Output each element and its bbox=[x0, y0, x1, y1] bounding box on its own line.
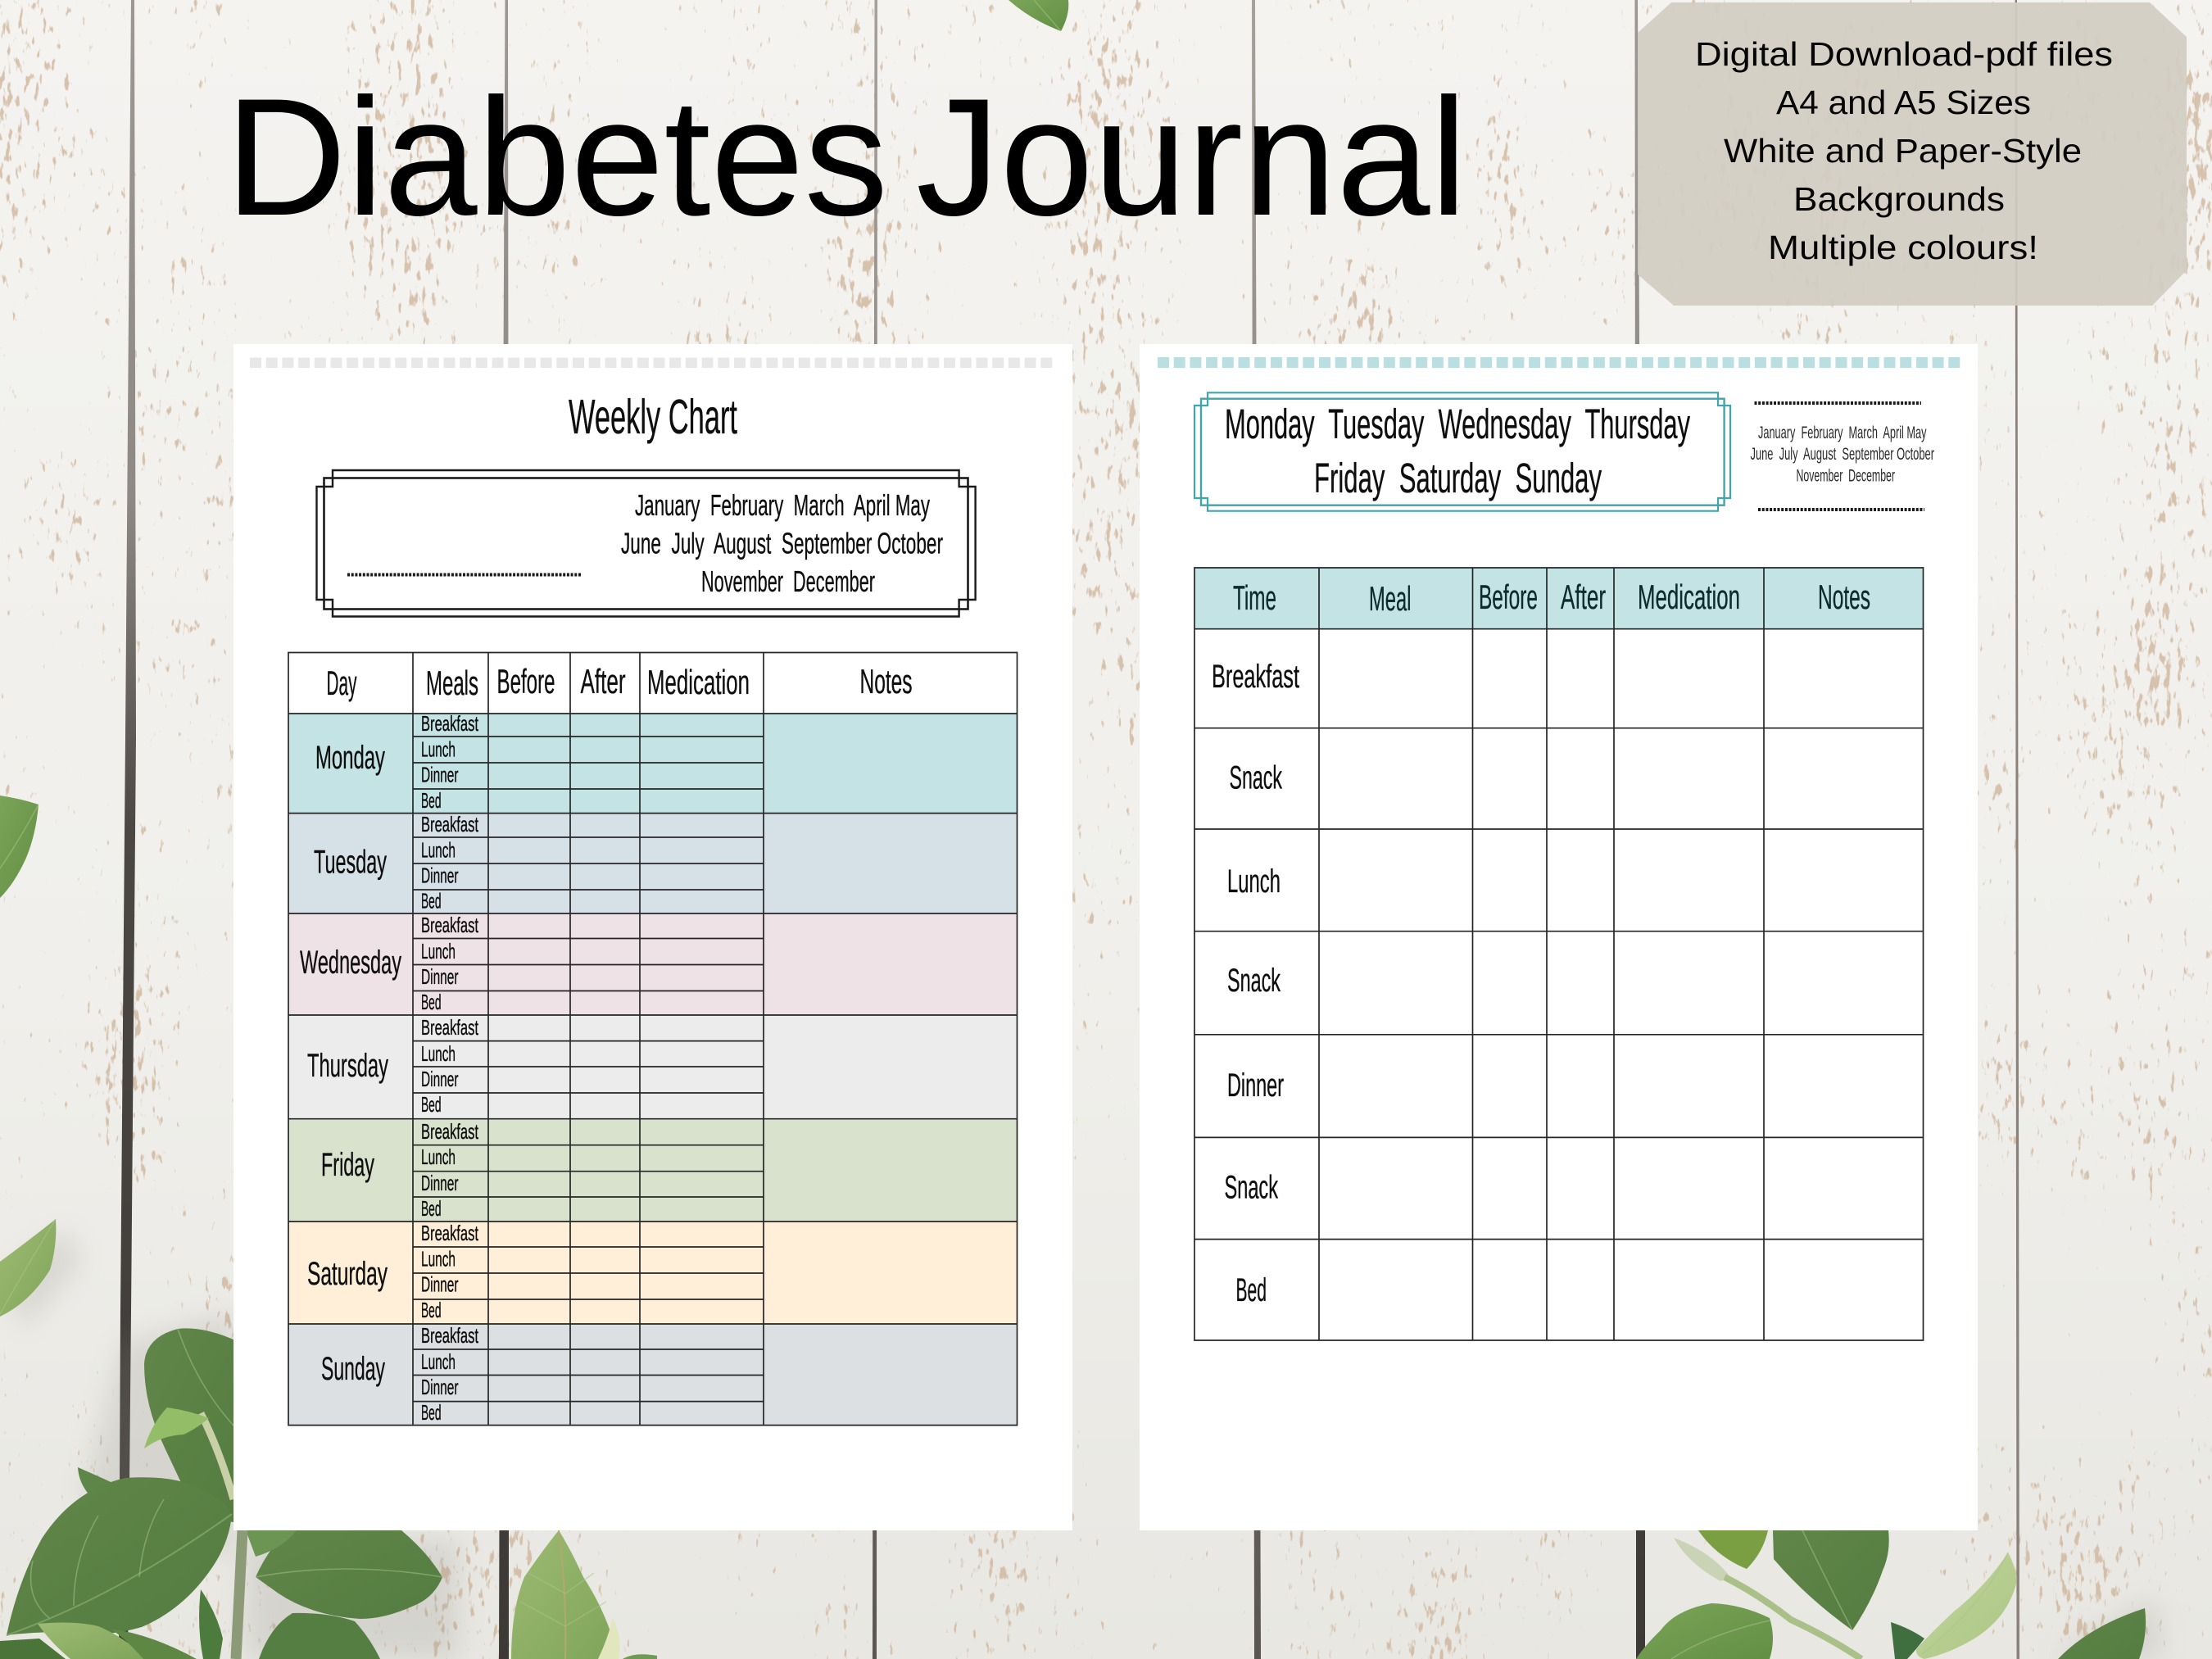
row: saturday: Breakfast bbox=[421, 1221, 478, 1245]
title: Journal bbox=[916, 64, 1467, 251]
row: sunday: Bed bbox=[421, 1400, 441, 1425]
badge text: A4 and A5 Sizes bbox=[1776, 84, 2031, 121]
leaf: top edge bbox=[1009, 0, 1068, 31]
row: wednesday: Breakfast bbox=[421, 913, 478, 937]
heading: weekly chart: Weekly Chart bbox=[569, 390, 737, 444]
weekly table bbox=[288, 652, 1018, 1426]
table header labels: Medication bbox=[1638, 578, 1740, 616]
badge text: Digital Download-pdf files bbox=[1695, 35, 2113, 73]
row: saturday: Lunch bbox=[421, 1247, 456, 1271]
leaf: lower centre dark leaf bbox=[259, 1613, 380, 1659]
row: sunday: Sunday bbox=[321, 1351, 385, 1387]
panel: daily log page bbox=[1140, 344, 1978, 1530]
leaf: small leaf at stem bbox=[246, 1530, 297, 1557]
stem: upper branch bbox=[201, 1413, 233, 1499]
time labels bbox=[1212, 659, 1299, 1308]
leaf: lower dark leaves bbox=[199, 1589, 223, 1659]
soft leaf shadows bbox=[0, 1229, 2163, 1659]
row: friday: Breakfast bbox=[421, 1119, 478, 1144]
month list bbox=[621, 488, 943, 598]
table header labels: Notes bbox=[1818, 578, 1870, 616]
row: thursday: Lunch bbox=[421, 1041, 456, 1066]
row: wednesday bbox=[288, 913, 1018, 1015]
leaf: light lower leaf bbox=[38, 1623, 146, 1659]
row: sunday: Breakfast bbox=[421, 1323, 478, 1348]
row: monday: Breakfast bbox=[421, 711, 478, 736]
row: wednesday: Dinner bbox=[421, 964, 459, 989]
row: friday bbox=[288, 1119, 1018, 1222]
row: monday: Bed bbox=[421, 788, 441, 813]
row: sunday: Lunch bbox=[421, 1349, 456, 1374]
time labels: Breakfast bbox=[1212, 659, 1299, 695]
time labels: Dinner bbox=[1227, 1067, 1284, 1104]
leaf: left edge upper bbox=[0, 796, 39, 898]
daily table bbox=[1194, 568, 1924, 1340]
time labels: Snack bbox=[1224, 1170, 1279, 1206]
row: wednesday: Lunch bbox=[421, 939, 456, 963]
title bbox=[225, 64, 1467, 251]
title: Diabetes bbox=[225, 64, 888, 251]
row: friday: Friday bbox=[321, 1147, 374, 1183]
row: friday: Lunch bbox=[421, 1145, 456, 1169]
row: monday: Monday bbox=[315, 740, 385, 776]
table header labels bbox=[326, 662, 913, 702]
row: thursday: Dinner bbox=[421, 1067, 459, 1091]
leaves: bottom left cluster bbox=[0, 1328, 657, 1659]
row: tuesday bbox=[288, 812, 1018, 913]
time labels: Lunch bbox=[1227, 863, 1281, 900]
leaf: small dark leaf bbox=[78, 1467, 116, 1496]
row: monday: Lunch bbox=[421, 737, 456, 762]
leaf: light bud leaf bbox=[144, 1407, 209, 1448]
weekday list: Friday Saturday Sunday bbox=[1314, 455, 1602, 501]
row: tuesday: Bed bbox=[421, 889, 441, 913]
leaf: left edge lower bbox=[0, 1219, 56, 1317]
weekday list: Monday Tuesday Wednesday Thursday bbox=[1225, 401, 1690, 447]
table header labels: Before bbox=[496, 662, 555, 700]
month list: November December bbox=[701, 564, 875, 598]
leaf: far right dark leaf bbox=[2058, 1608, 2146, 1659]
row: saturday: Dinner bbox=[421, 1272, 459, 1297]
table header labels: Meal bbox=[1369, 579, 1411, 618]
table header labels bbox=[1233, 578, 1870, 618]
weekday frame bbox=[1194, 392, 1730, 511]
date block with months bbox=[1750, 403, 1934, 510]
row: saturday: Saturday bbox=[307, 1256, 388, 1292]
badge text bbox=[1695, 35, 2113, 266]
month list: January February March April May bbox=[635, 488, 930, 522]
weekday list bbox=[1225, 401, 1690, 501]
row: saturday bbox=[288, 1221, 1018, 1324]
leaf: centre bottom leaf bbox=[511, 1530, 619, 1659]
table header labels: Meals bbox=[426, 664, 478, 702]
leaf: dark upper leaf bbox=[1773, 1530, 1889, 1630]
table header labels: Medication bbox=[647, 663, 750, 701]
row: tuesday: Lunch bbox=[421, 837, 456, 862]
row: thursday: Thursday bbox=[307, 1048, 388, 1084]
badge text: Backgrounds bbox=[1793, 180, 2005, 218]
leaf: lower left leaf bbox=[1636, 1603, 1773, 1659]
table header labels: Notes bbox=[860, 662, 913, 700]
row: friday: Dinner bbox=[421, 1171, 459, 1195]
leaves: bottom right cluster bbox=[1636, 1530, 2146, 1659]
table header labels: Before bbox=[1479, 578, 1538, 616]
leaf: upper dark leaf behind page bbox=[144, 1328, 243, 1524]
date block with months: November December bbox=[1796, 467, 1895, 486]
table header labels: Time bbox=[1233, 578, 1276, 617]
badge text: White and Paper-Style bbox=[1724, 132, 2082, 170]
leaf: wide leaf right of stem bbox=[256, 1530, 442, 1619]
month list: June July August September October bbox=[621, 526, 943, 560]
date block with months: June July August September October bbox=[1750, 445, 1934, 464]
row: tuesday: Tuesday bbox=[314, 844, 387, 880]
row: sunday bbox=[288, 1323, 1018, 1426]
time labels: Snack bbox=[1229, 760, 1283, 796]
time labels: Bed bbox=[1235, 1272, 1267, 1308]
leaf: small light upper leaf bbox=[1698, 1530, 1768, 1569]
row: wednesday: Bed bbox=[421, 990, 441, 1014]
time labels: Snack bbox=[1227, 963, 1281, 999]
row: monday bbox=[288, 711, 1018, 814]
date frame bbox=[316, 470, 976, 616]
leaf: large dark leaf bbox=[7, 1477, 232, 1635]
row: thursday: Breakfast bbox=[421, 1015, 478, 1040]
leaf: dark centre leaf bbox=[1891, 1622, 1924, 1659]
stem bbox=[1725, 1577, 1861, 1659]
table header labels: After bbox=[580, 662, 626, 700]
row: friday: Bed bbox=[421, 1196, 441, 1221]
row: thursday bbox=[288, 1015, 1018, 1119]
row: thursday: Bed bbox=[421, 1092, 441, 1117]
row: wednesday: Wednesday bbox=[300, 945, 401, 981]
bud bbox=[1674, 1538, 1730, 1581]
table header labels: After bbox=[1561, 578, 1606, 616]
stem bbox=[236, 1530, 243, 1659]
row: saturday: Bed bbox=[421, 1298, 441, 1322]
table header labels: Day bbox=[326, 664, 357, 702]
info badge bbox=[1638, 2, 2187, 306]
badge text: Multiple colours! bbox=[1768, 229, 2038, 266]
leaf: pale right leaf bbox=[1916, 1552, 2016, 1659]
date block with months: January February March April May bbox=[1758, 424, 1927, 442]
row: sunday: Dinner bbox=[421, 1375, 459, 1399]
row: monday: Dinner bbox=[421, 762, 459, 786]
panel: weekly chart page bbox=[233, 344, 1072, 1530]
row: tuesday: Breakfast bbox=[421, 812, 478, 836]
row: tuesday: Dinner bbox=[421, 863, 459, 888]
